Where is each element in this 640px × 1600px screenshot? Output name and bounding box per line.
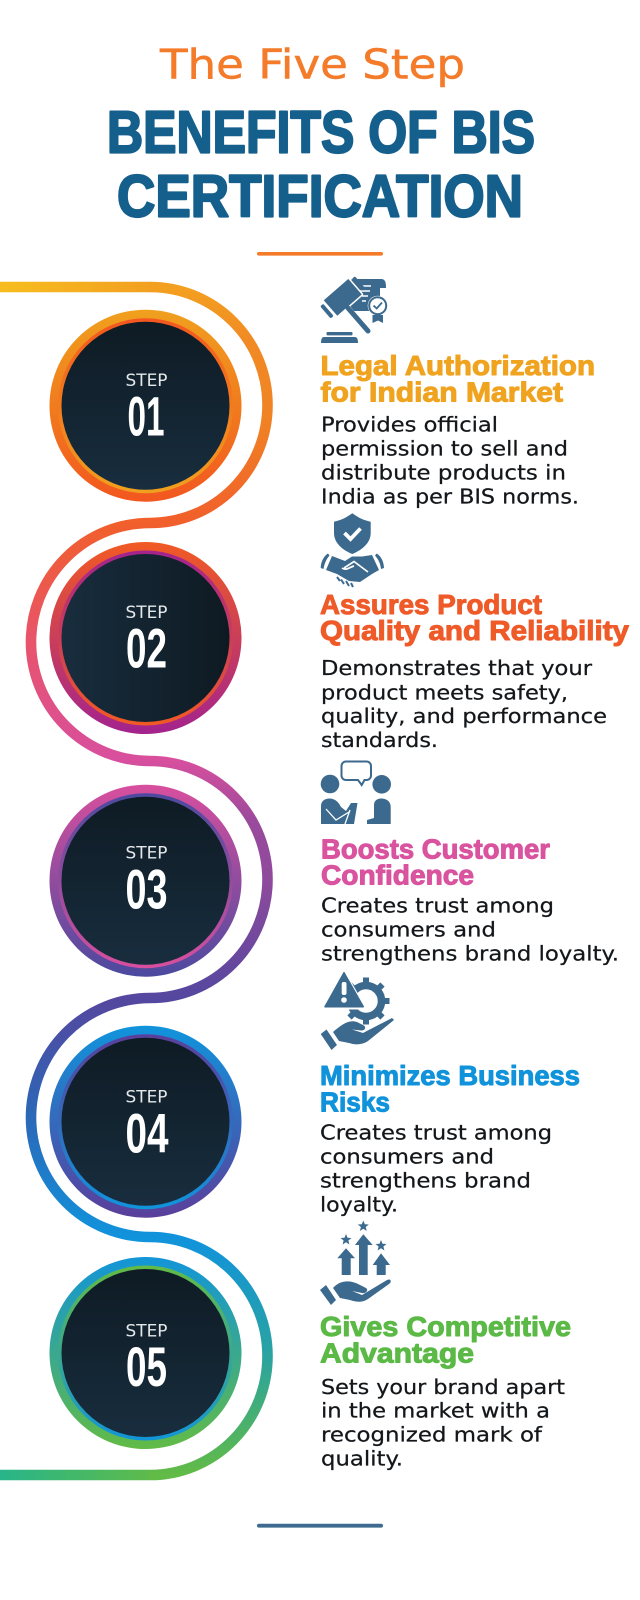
panel: step 4: [50, 969, 580, 1218]
icon: rising arrows, stars and hand: [320, 1220, 391, 1305]
text block: step 4 description: consumers and: [320, 1144, 494, 1168]
panel: step 3: [50, 762, 619, 977]
winding gradient path: [0, 287, 267, 1475]
heading: Assures Product: Quality and Reliability: [320, 615, 630, 646]
heading line 1: BENEFITS OF BIS: [107, 100, 535, 166]
panel: step 1: [50, 274, 595, 509]
text block: step 3 description: strengthens brand loyalty.: [321, 942, 619, 966]
heading: Legal Authorization: [320, 350, 595, 408]
step badge 05: [50, 1257, 242, 1449]
icon: two people talking: [321, 762, 391, 824]
text block: step 1 description: distribute products in: [321, 461, 566, 485]
text block: step 2 description: [321, 656, 607, 752]
step badge 04: 04: [126, 1102, 168, 1165]
panel: step 2: [50, 513, 630, 752]
text block: step 5 description: recognized mark of: [321, 1423, 543, 1447]
heading: Gives Competitive Advantage: Gives Competitive: [320, 1311, 571, 1342]
text block: step 1 description: Provides official: [321, 413, 498, 437]
heading: Legal Authorization: Legal Authorization: [320, 350, 595, 381]
step badge 04: [50, 1026, 242, 1218]
text block: step 4 description: loyalty.: [320, 1192, 398, 1216]
text block: step 3 description: consumers and: [321, 918, 496, 942]
text block: step 5 description: Sets your brand apart: [321, 1375, 565, 1399]
step badge 03: 03: [126, 857, 168, 920]
step badge 01: [50, 310, 242, 502]
panel: step 5: [50, 1220, 571, 1471]
heading: Boosts Customer Confidence: Confidence: [321, 859, 474, 890]
step badge 01: STEP: [126, 371, 168, 390]
step badge 02: [50, 542, 242, 734]
text block: step 5 description: [321, 1375, 565, 1471]
text block: step 1 description: permission to sell and: [321, 437, 568, 461]
text block: step 3 description: Creates trust among: [321, 894, 554, 918]
title line: The Five Step: The Five Step: [159, 40, 465, 88]
step badge 03: [50, 785, 242, 977]
text block: step 2 description: quality, and performance: [321, 704, 607, 728]
icon: warning, gear and hand: [321, 969, 394, 1050]
heading: Assures Product: Assures Product: [320, 589, 542, 620]
step badge 04: STEP: [126, 1087, 168, 1106]
heading line 2: CERTIFICATION: [117, 164, 523, 230]
heading: Minimizes Business Risks: Minimizes Business: [320, 1060, 580, 1091]
heading: Legal Authorization: for Indian Market: [320, 377, 563, 408]
text block: step 5 description: quality.: [321, 1447, 403, 1471]
heading: Gives Competitive Advantage: Advantage: [320, 1338, 474, 1369]
text block: step 3 description: [321, 894, 619, 966]
title: [107, 40, 535, 230]
step badge 01: 01: [128, 385, 164, 448]
heading: Boosts Customer Confidence: Boosts Customer: [321, 833, 550, 864]
step badge 02: STEP: [126, 603, 168, 622]
text block: step 2 description: Demonstrates that your: [321, 656, 593, 680]
text block: step 4 description: [320, 1120, 552, 1216]
heading: Minimizes Business Risks: [320, 1060, 580, 1118]
step badge 02: 02: [126, 616, 167, 679]
heading: Gives Competitive Advantage: [320, 1311, 571, 1369]
heading: Assures Product: [320, 589, 630, 646]
divider: orange rule: [257, 252, 383, 256]
heading: Minimizes Business Risks: Risks: [320, 1087, 390, 1118]
text block: step 5 description: in the market with a: [321, 1399, 550, 1423]
step badge 03: STEP: [126, 843, 168, 862]
text block: step 2 description: product meets safety,: [321, 680, 568, 704]
step badge 05: STEP: [126, 1322, 168, 1341]
step badge 05: 05: [126, 1335, 167, 1398]
text block: step 4 description: strengthens brand: [320, 1168, 531, 1192]
text block: step 2 description: standards.: [321, 728, 438, 752]
divider: blue rule: [257, 1524, 383, 1528]
icon: gavel and certificate: [318, 274, 388, 343]
text block: step 4 description: Creates trust among: [320, 1120, 552, 1144]
text block: step 1 description: India as per BIS norms.: [321, 485, 579, 509]
text block: step 1 description: [321, 413, 579, 509]
icon: shield and handshake: [321, 513, 384, 587]
heading: Boosts Customer Confidence: [321, 833, 550, 890]
